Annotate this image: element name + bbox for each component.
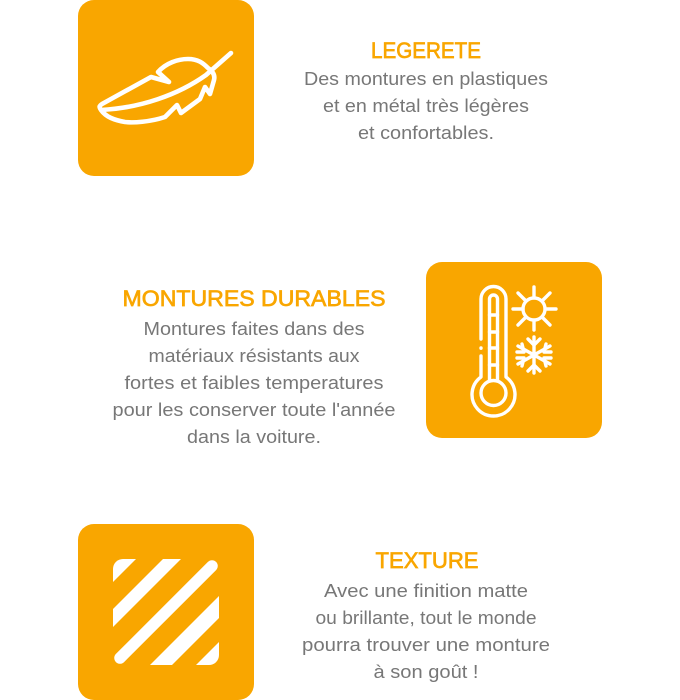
text block: montures durables: fortes et faibles temperatures — [124, 372, 384, 393]
panel: legerete — [78, 0, 548, 176]
heading: texture: TEXTURE — [376, 548, 478, 573]
icon: thermometer, sun and snowflake — [426, 262, 602, 438]
text block: texture: pourra trouver une monture — [302, 634, 550, 655]
text block: montures durables: Montures faites dans des — [144, 318, 364, 339]
text block: texture: ou brillante, tout le monde — [316, 607, 536, 628]
icon: diagonal stripes — [78, 524, 254, 700]
text block: legerete: Des montures en plastiques — [304, 68, 548, 89]
heading: montures durables: MONTURES DURABLES — [122, 286, 386, 311]
text block: legerete — [304, 68, 548, 143]
icon: feather — [78, 0, 254, 176]
text block: montures durables: dans la voiture. — [187, 426, 321, 447]
text block: montures durables: pour les conserver toute l'année — [112, 399, 396, 420]
text block: montures durables — [112, 318, 396, 447]
panel: texture — [78, 524, 550, 700]
heading: legerete: LEGERETE — [371, 38, 481, 63]
text block: texture — [302, 580, 550, 682]
text block: legerete: et confortables. — [358, 122, 494, 143]
panel: montures durables — [112, 262, 602, 447]
text block: legerete: et en métal très légères — [323, 95, 529, 116]
text block: texture: Avec une finition matte — [324, 580, 528, 601]
text block: montures durables: matériaux résistants aux — [148, 345, 360, 366]
text block: texture: à son goût ! — [374, 661, 478, 682]
